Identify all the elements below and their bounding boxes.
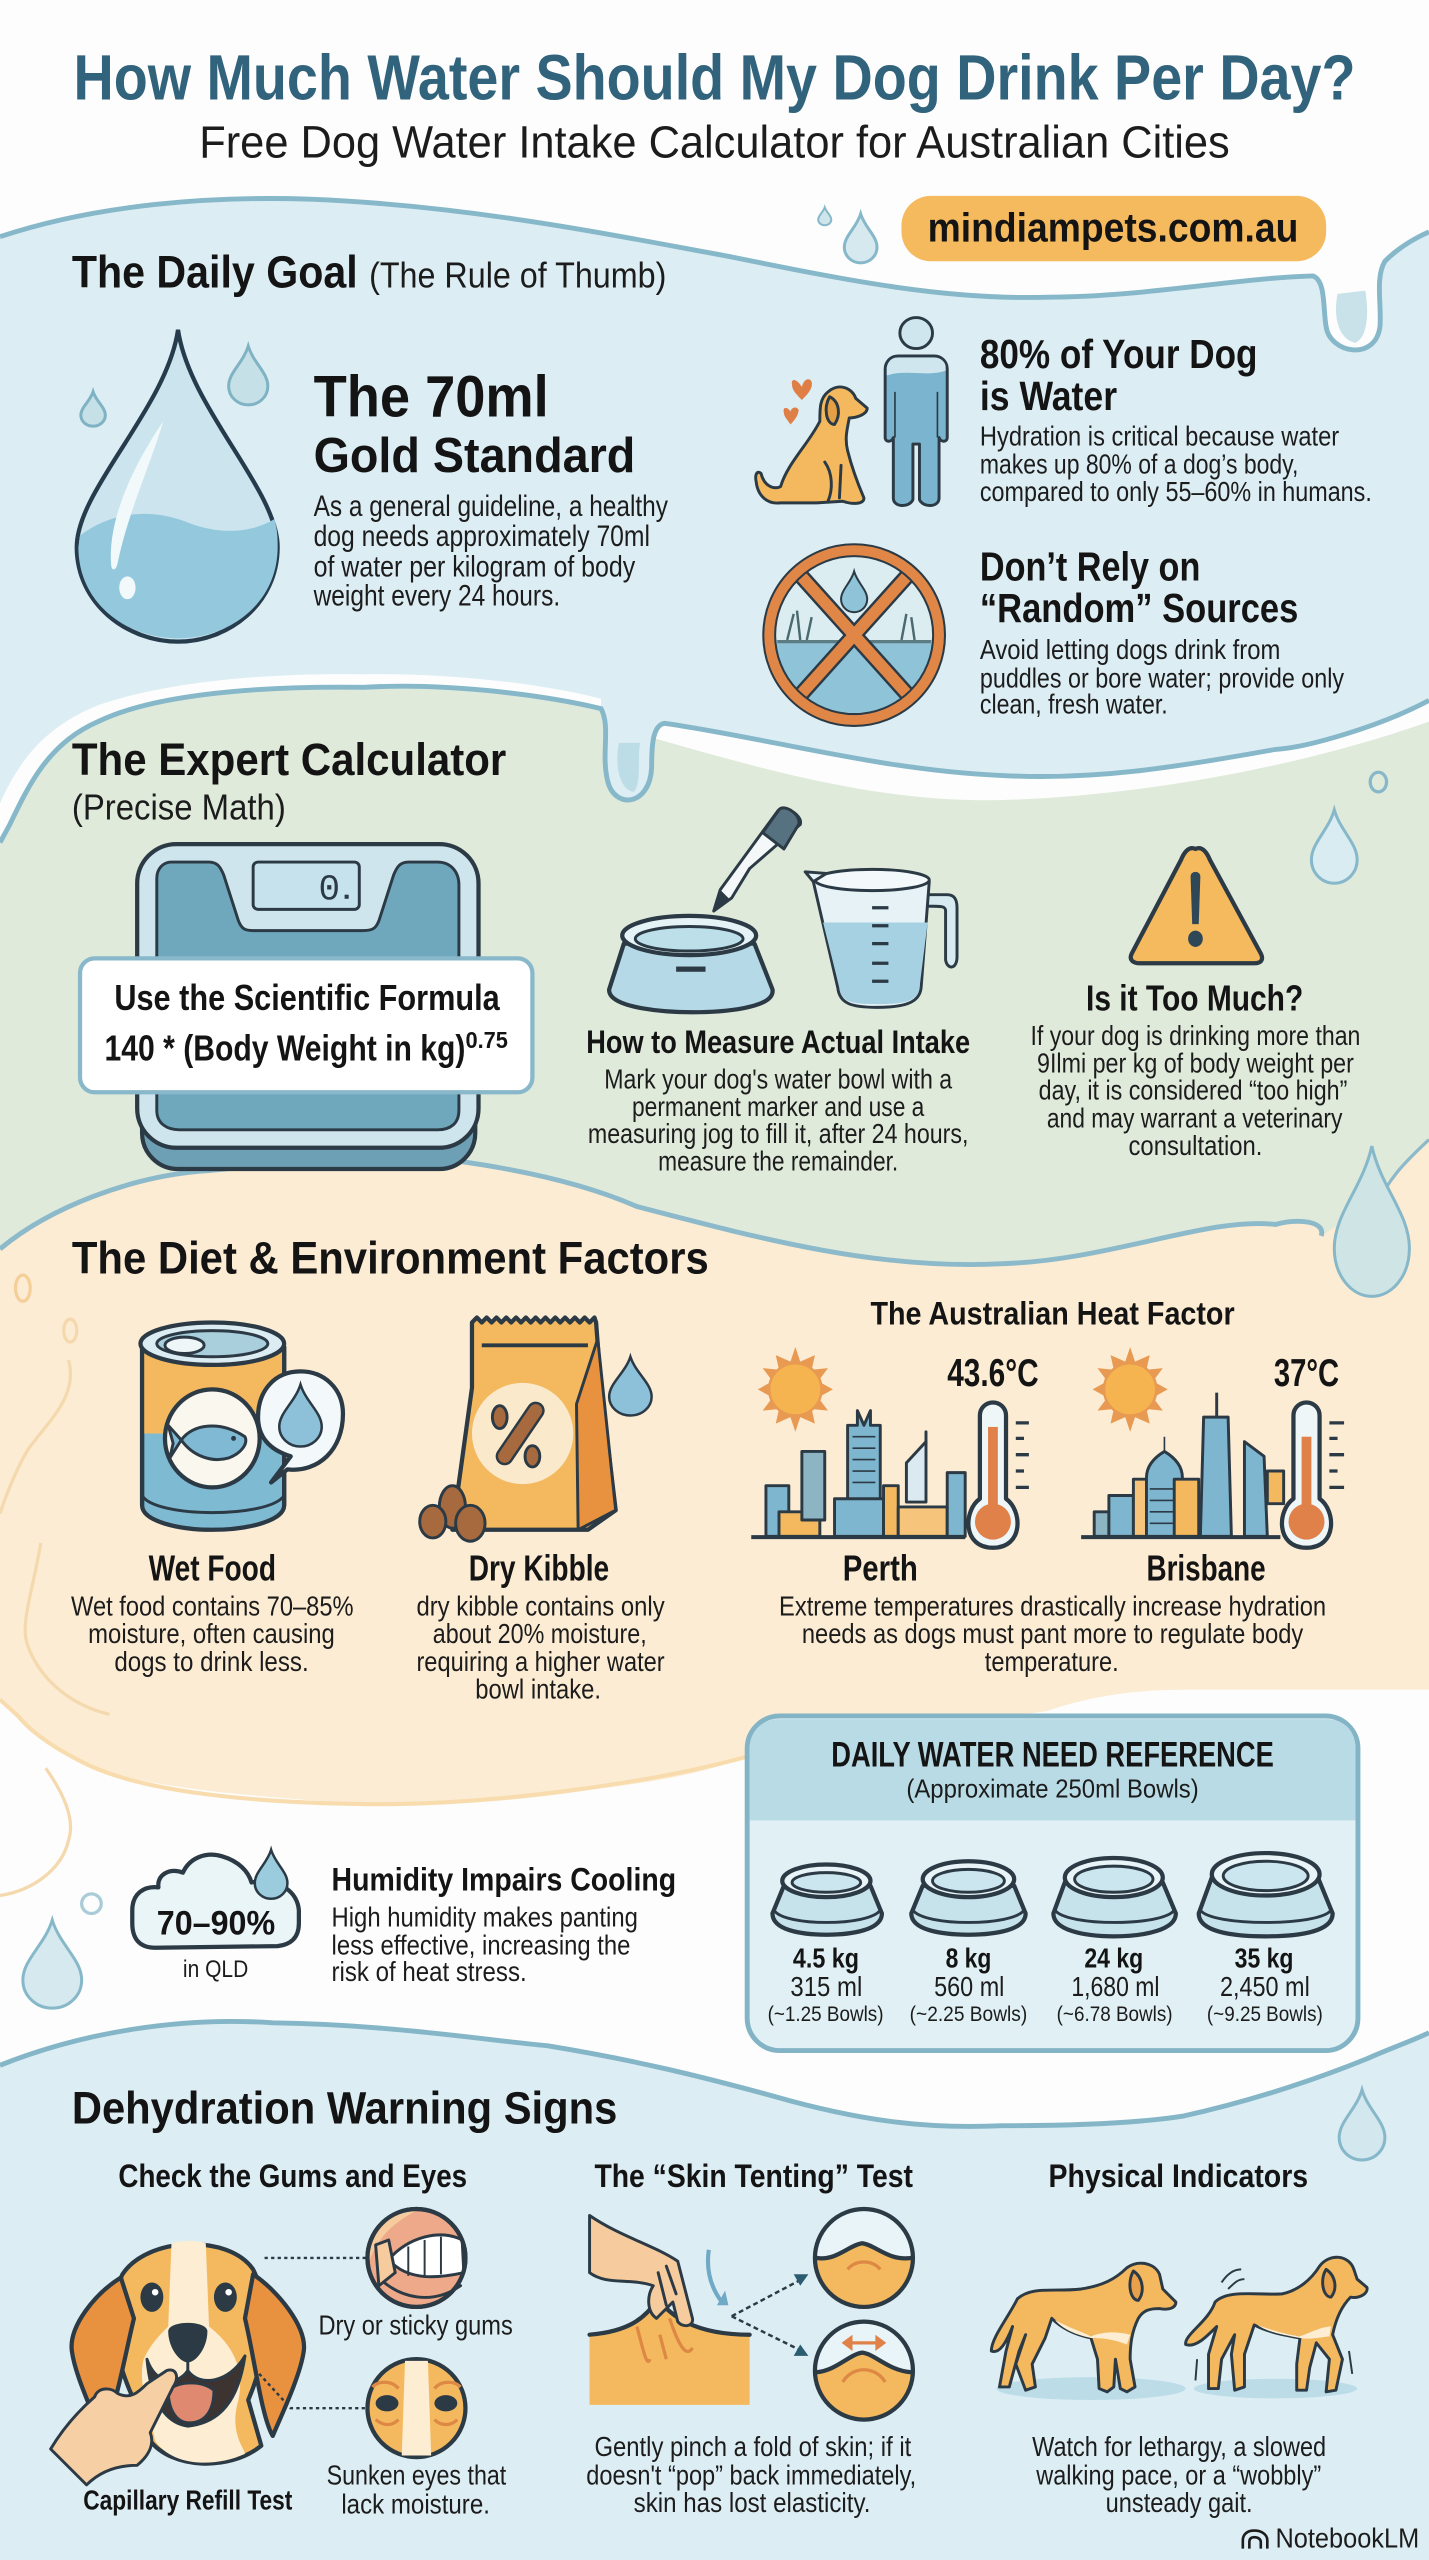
icon: marker pen xyxy=(714,808,801,911)
text block: humidity impairs cooling: High humidity makes panting xyxy=(332,1902,638,1933)
text block: don't rely on random sources: “Random” Sources xyxy=(980,585,1298,631)
icon: bathroom scale: 0 xyxy=(318,870,340,911)
bowl 24 kg xyxy=(1053,1858,1176,2026)
bowl 8 kg: 560 ml xyxy=(934,1971,1004,2002)
icon: humidity cloud xyxy=(132,1850,299,1983)
text block: the 70ml gold standard: As a general guideline, a healthy xyxy=(314,490,668,523)
caption: capillary refill test: Capillary Refill Test xyxy=(83,2484,292,2515)
heading: the expert calculator: The Expert Calculator xyxy=(72,734,506,785)
text block: how to measure actual intake xyxy=(586,1023,970,1177)
panel: expert calculator background xyxy=(0,669,1429,1469)
bowl 4.5 kg xyxy=(768,1864,884,2026)
panel: diet and environment background xyxy=(0,1140,1429,1805)
chart: perth skyline and thermometer xyxy=(751,1347,1039,1548)
text block: skin tenting explanation: skin has lost elasticity. xyxy=(634,2487,870,2518)
text block: heat factor labels: needs as dogs must pant more to regulate body xyxy=(802,1618,1303,1649)
website pill xyxy=(901,196,1326,261)
text block: don't rely on random sources xyxy=(980,544,1344,719)
text block: 80% of your dog is water: is Water xyxy=(980,373,1117,419)
text block: how to measure actual intake: Mark your dog's water bowl with a xyxy=(604,1063,953,1094)
icon: humidity cloud: in QLD xyxy=(183,1956,248,1983)
text block: don't rely on random sources: puddles or bore water; provide only xyxy=(980,662,1344,693)
caption: dry or sticky gums: Dry or sticky gums xyxy=(318,2310,513,2341)
heading: the australian heat factor: The Australian Heat Factor xyxy=(870,1295,1235,1332)
text block: physical indicators explanation: unsteady gait. xyxy=(1106,2487,1253,2518)
text block: heat factor labels: Brisbane xyxy=(1146,1547,1266,1588)
heading: diet and environment factors: The Diet & Environment Factors xyxy=(72,1232,709,1283)
panel: daily goal background xyxy=(0,199,1429,842)
icon: skin stays tented xyxy=(815,2322,913,2420)
text block: is it too much xyxy=(1031,978,1360,1161)
text block: is it too much: Is it Too Much? xyxy=(1086,978,1303,1019)
icon: humidity cloud: 70–90% xyxy=(157,1905,275,1943)
caption: sunken eyes: lack moisture. xyxy=(341,2488,490,2519)
text block: dry kibble: requiring a higher water xyxy=(416,1646,665,1677)
text block: humidity impairs cooling: risk of heat stress. xyxy=(332,1956,527,1987)
bowl 35 kg: 2,450 ml xyxy=(1220,1971,1310,2002)
icon: big water drop xyxy=(77,330,278,642)
formula box: 0.75 xyxy=(465,1027,508,1053)
icon: skin snaps back xyxy=(815,2209,913,2307)
text block: dry kibble: dry kibble contains only xyxy=(416,1591,665,1622)
text block: the 70ml gold standard: The 70ml xyxy=(314,364,549,429)
text block: dry kibble: about 20% moisture, xyxy=(433,1618,647,1649)
bowl 8 kg xyxy=(910,1861,1027,2026)
text block: 80% of your dog is water: 80% of Your Dog xyxy=(980,331,1258,377)
text block: don't rely on random sources: Don’t Rely on xyxy=(980,544,1200,590)
panel: daily water need reference table xyxy=(747,1716,1358,2051)
heading: the expert calculator xyxy=(72,734,506,828)
bowl 4.5 kg: (~1.25 Bowls) xyxy=(768,2003,884,2026)
illustration: dog face with capillary refill test xyxy=(51,2241,366,2485)
text block: how to measure actual intake: measure the remainder. xyxy=(658,1146,898,1177)
text block: humidity impairs cooling: Humidity Impairs Cooling xyxy=(332,1861,676,1898)
heading: the daily goal: The Daily Goal xyxy=(72,246,358,297)
text block: wet food: Wet food contains 70–85% xyxy=(71,1591,354,1622)
text block: the 70ml gold standard: of water per kilogram of body xyxy=(314,550,636,583)
watermark: NotebookLM: NotebookLM xyxy=(1275,2523,1419,2554)
heading: the daily goal xyxy=(72,246,666,297)
text block: how to measure actual intake: How to Measure Actual Intake xyxy=(586,1023,970,1060)
formula box: 140 * (Body Weight in kg) xyxy=(105,1028,465,1069)
text block: humidity impairs cooling: less effective, increasing the xyxy=(332,1929,630,1960)
heading: skin tenting test: The “Skin Tenting” Test xyxy=(594,2157,913,2194)
heading: the expert calculator: (Precise Math) xyxy=(72,787,286,828)
text block: how to measure actual intake: permanent marker and use a xyxy=(632,1091,925,1122)
text block: physical indicators explanation xyxy=(1032,2431,1326,2518)
callout: leader lines xyxy=(255,2258,366,2408)
icon: measuring jug xyxy=(805,869,957,1007)
icon: gums close-up xyxy=(367,2209,465,2307)
illustration: wobbly dog xyxy=(1186,2257,1367,2398)
icon: no puddles sign xyxy=(769,550,939,720)
heading: check the gums and eyes: Check the Gums and Eyes xyxy=(118,2157,467,2194)
formula box: Use the Scientific Formula xyxy=(114,977,501,1018)
text block: is it too much: consultation. xyxy=(1129,1130,1262,1161)
chart: perth skyline and thermometer: 43.6°C xyxy=(947,1352,1039,1395)
text block: is it too much: If your dog is drinking more than xyxy=(1031,1020,1360,1051)
text block: the 70ml gold standard: dog needs approximately 70ml xyxy=(314,520,650,553)
bowl 24 kg: 1,680 ml xyxy=(1071,1971,1160,2002)
bowl 35 kg: 35 kg xyxy=(1235,1942,1293,1973)
heading: physical indicators: Physical Indicators xyxy=(1048,2157,1308,2194)
icon: sunken eyes close-up xyxy=(367,2359,465,2457)
bowl 4.5 kg: 315 ml xyxy=(790,1971,862,2002)
illustration: healthy standing dog xyxy=(991,2263,1186,2400)
text block: is it too much: day, it is considered “too high” xyxy=(1039,1075,1347,1106)
text block: the 70ml gold standard: Gold Standard xyxy=(314,429,635,483)
icon: water bowl xyxy=(609,916,773,1012)
text block: dry kibble xyxy=(416,1547,665,1704)
subtitle: Free Dog Water Intake Calculator for Australian Cities xyxy=(199,117,1230,168)
icon: bathroom scale xyxy=(137,844,479,1169)
text block: skin tenting explanation: Gently pinch a fold of skin; if it xyxy=(594,2431,912,2462)
decorative water drops xyxy=(0,207,1409,2160)
text block: the 70ml gold standard xyxy=(313,364,668,613)
table header xyxy=(831,1736,1274,1804)
bowl 24 kg: (~6.78 Bowls) xyxy=(1057,2003,1173,2026)
icon: wet food can xyxy=(140,1322,343,1530)
icon: warning triangle xyxy=(1131,848,1262,963)
icon: dog and person xyxy=(756,318,947,506)
text block: 80% of your dog is water: makes up 80% of a dog’s body, xyxy=(980,448,1298,479)
text block: 80% of your dog is water xyxy=(980,331,1372,507)
text block: is it too much: 9Ilmi per kg of body weight per xyxy=(1037,1048,1354,1079)
text block: dry kibble: bowl intake. xyxy=(475,1673,601,1704)
bowl 8 kg: 8 kg xyxy=(946,1942,991,1973)
text block: heat factor labels: temperature. xyxy=(985,1646,1119,1677)
bowl 35 kg: (~9.25 Bowls) xyxy=(1207,2003,1323,2026)
chart: brisbane skyline and thermometer: 37°C xyxy=(1274,1352,1339,1395)
text block: don't rely on random sources: Avoid letting dogs drink from xyxy=(980,634,1280,665)
text block: skin tenting explanation xyxy=(586,2431,916,2518)
text block: humidity impairs cooling xyxy=(332,1861,676,1987)
text block: wet food xyxy=(71,1547,354,1677)
bowl 8 kg: (~2.25 Bowls) xyxy=(910,2003,1027,2026)
heading: the daily goal: (The Rule of Thumb) xyxy=(369,254,666,295)
text block: heat factor labels: Perth xyxy=(843,1547,918,1588)
text block: skin tenting explanation: doesn't “pop” back immediately, xyxy=(586,2459,916,2490)
text block: heat factor labels: Extreme temperatures drastically increase hydration xyxy=(779,1591,1326,1622)
illustration: pinching skin xyxy=(590,2216,808,2405)
text block: is it too much: and may warrant a veterinary xyxy=(1047,1102,1343,1133)
text block: physical indicators explanation: walking pace, or a “wobbly” xyxy=(1035,2459,1321,2490)
text block: dry kibble: Dry Kibble xyxy=(469,1547,609,1588)
website pill: mindiampets.com.au xyxy=(928,205,1298,251)
text block: the 70ml gold standard: weight every 24 hours. xyxy=(313,580,560,613)
caption: sunken eyes xyxy=(327,2459,507,2519)
chart: brisbane skyline and thermometer xyxy=(1081,1347,1344,1548)
text block: 80% of your dog is water: Hydration is critical because water xyxy=(980,421,1339,452)
table header: DAILY WATER NEED REFERENCE xyxy=(831,1736,1274,1775)
formula box xyxy=(80,958,532,1092)
icon: dry kibble bag xyxy=(420,1318,652,1541)
text block: wet food: dogs to drink less. xyxy=(114,1646,309,1677)
table header: (Approximate 250ml Bowls) xyxy=(906,1774,1199,1804)
heading: dehydration warning signs: Dehydration Warning Signs xyxy=(72,2083,617,2134)
text block: wet food: moisture, often causing xyxy=(88,1618,335,1649)
caption: sunken eyes: Sunken eyes that xyxy=(327,2459,507,2490)
text block: don't rely on random sources: clean, fresh water. xyxy=(980,688,1168,719)
text block: physical indicators explanation: Watch for lethargy, a slowed xyxy=(1032,2431,1326,2462)
bowl 35 kg xyxy=(1199,1853,1333,2026)
text block: heat factor labels xyxy=(779,1547,1326,1677)
bowl 4.5 kg: 4.5 kg xyxy=(793,1942,859,1973)
arrows to test results xyxy=(732,2274,808,2356)
panel: dehydration background xyxy=(0,2021,1429,2560)
bowl 24 kg: 24 kg xyxy=(1084,1942,1143,1973)
text block: how to measure actual intake: measuring jog to fill it, after 24 hours, xyxy=(588,1118,968,1149)
text block: wet food: Wet Food xyxy=(149,1547,276,1588)
